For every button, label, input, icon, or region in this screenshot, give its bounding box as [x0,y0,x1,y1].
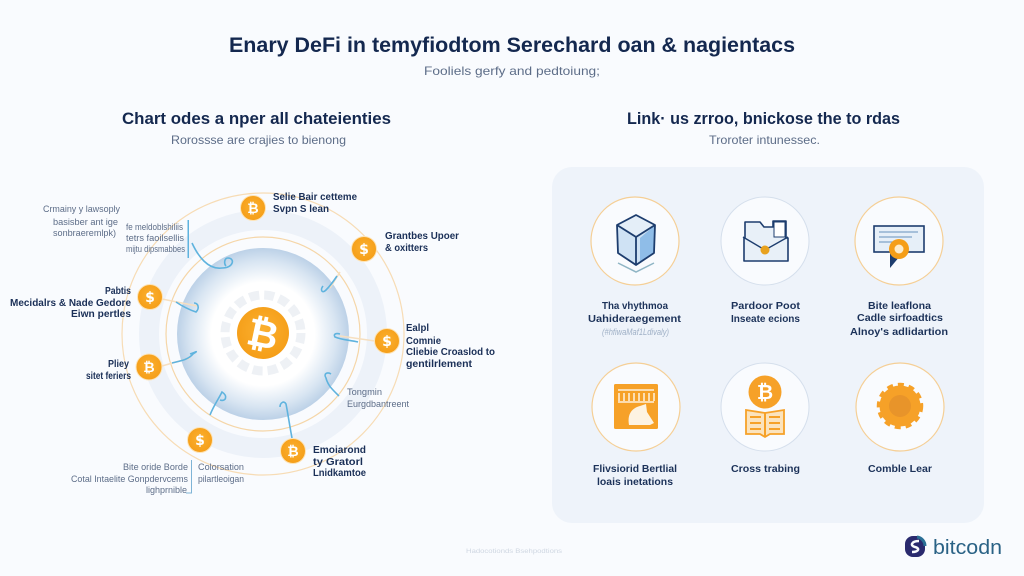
label: left upper coin: Eiwn pertles [71,309,131,320]
card label: cube: (#hfiwaMaf1Ldivaly) [602,327,669,337]
card: coin and book: ₿ [757,380,773,404]
card label: envelope: Pardoor Poot [731,300,801,312]
label: left upper coin: Pabtis [105,286,131,297]
coin: left upper [138,284,162,310]
card label: ledger: Flivsiorid Bertlial [593,463,677,475]
label: top coin: Svpn S lean [273,204,329,215]
label: bottom left: Colorsation [198,462,244,473]
label: lower right grey: Eurgdbantreent [347,399,409,410]
panel: features [552,167,984,523]
coin: left upper: $ [145,290,155,306]
label: upper left grey: Crmainy y lawsoply [43,204,120,215]
label: lower right coin: Lnidkamtoe [313,468,366,479]
card label: cube: Tha vhythmoa [602,300,668,312]
label: upper right coin: & oxitters [385,243,428,254]
card label: coin and book: Cross trabing [731,463,800,475]
label: bottom left: Cotal Intaelite Gonpdervcems [71,474,188,485]
coin: top: ₿ [247,201,259,217]
card label: envelope [731,300,801,325]
label: upper inner grey [126,220,189,258]
card label: certificate: Cadle sirfoadtics [857,312,943,324]
card label: envelope: Inseate ecions [731,313,800,325]
card label: ledger [593,463,677,488]
title: Enary DeFi in temyfiodtom Serechard oan & nagientacs [229,34,795,57]
label: upper right coin [385,231,459,254]
coin: left lower [136,354,162,380]
card label: cube: Uahideraegement [588,313,682,325]
label: left lower coin: Pliey [108,359,129,370]
coin: top [240,196,266,220]
label: right coin: Comnie [406,336,441,347]
logo: bitcodn [905,536,1002,559]
label: bottom left: lighprnible [146,485,187,496]
central coin: ₿ [243,309,283,359]
label: upper inner grey: fe meldoblshiliis [126,222,183,233]
right subheading: Troroter intunessec. [709,133,820,147]
card: envelope [721,197,809,285]
coin: right: $ [382,334,392,350]
label: upper left grey: basisber ant ige [53,217,118,228]
label: top coin [273,192,357,215]
label: lower right coin [313,445,366,479]
card label: gear: Comble Lear [868,463,932,475]
card label: certificate: Bite leaflona [868,300,931,312]
coin: lower right [280,438,306,464]
label: upper right coin: Grantbes Upoer [385,231,459,242]
coin: upper right [352,236,376,262]
logo: bitcodn: bitcodn [933,537,1002,559]
label: left upper coin: Mecidalrs & Nade Gedore [10,298,131,309]
concentric ring chart [122,193,404,475]
card: gear [856,363,944,451]
label: left lower coin [86,359,131,382]
left subheading: Rorossse are crajies to bienong [171,133,346,147]
label: upper inner grey: mijtu dipsmabbes [126,244,185,255]
label: bottom left: pilartleoigan [198,474,244,485]
label: upper left grey [43,204,120,239]
coin: left lower: ₿ [143,360,155,376]
label: lower right grey [347,387,409,410]
label: right coin: gentilrlement [406,359,473,370]
card: certificate [855,197,943,285]
card: coin and book [721,363,809,451]
subtitle: Fooliels gerfy and pedtoiung; [424,64,600,78]
card label: ledger: loais inetations [597,476,673,488]
label: top coin: Selie Bair cetteme [273,192,357,203]
label: bottom left: Bite oride Borde [123,462,188,473]
right heading: Link· us zrroo, bnickose the to rdas [627,109,900,128]
label: left lower coin: sitet feriers [86,371,131,382]
label: left upper coin [10,286,131,320]
label: right coin [406,323,495,370]
label: right coin: Cliebie Croaslod to [406,347,495,358]
coin: upper right: $ [359,242,369,258]
label: right coin: Ealpl [406,323,429,334]
coin: lower right: ₿ [287,444,299,460]
label: bottom left [71,460,244,496]
connector arrows [162,243,375,438]
card label: certificate: Alnoy's adlidartion [850,326,948,338]
coin: lower left: $ [195,433,205,449]
card label: certificate [850,300,948,338]
label: upper inner grey: tetrs faoilsellis [126,233,184,244]
label: lower right coin: ty Gratorl [313,457,363,468]
label: lower right grey: Tongmin [347,387,382,398]
left heading: Chart odes a nper all chateienties [122,109,391,128]
label: lower right coin: Emoiarond [313,445,366,456]
card: cube [591,197,679,285]
card: ledger [592,363,680,451]
coin: lower left [188,428,212,452]
coin: right [374,328,400,354]
card label: cube [588,300,682,337]
footer note: Hadocotionds Bsehpodtions [466,548,563,555]
label: upper left grey: sonbraeremlpk) [53,228,116,239]
